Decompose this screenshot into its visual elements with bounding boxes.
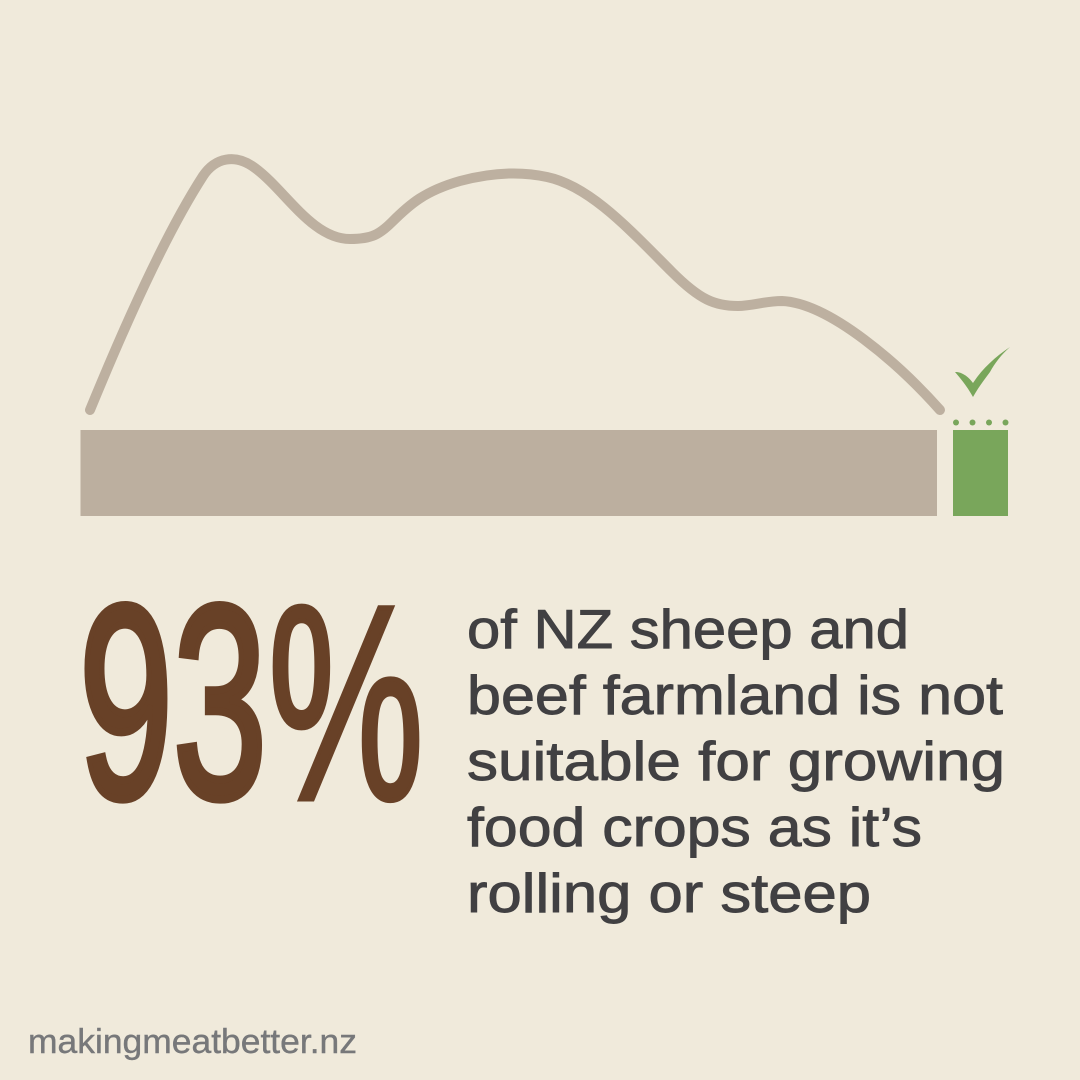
big number 93%: 93 [79,549,267,856]
icon: check mark [955,347,1010,397]
description text [467,598,1005,924]
dotted line above green bar [953,420,1008,426]
description text: of NZ sheep and [467,598,909,660]
description text: rolling or steep [467,862,871,924]
bar: unsuitable land 93% [80,430,937,516]
hill outline [90,159,940,410]
bar: suitable land 7% [953,430,1008,516]
description text: food crops as it’s [467,796,922,858]
website footer: makingmeatbetter.nz [28,1023,357,1061]
big number 93%: % [268,547,424,858]
description text: suitable for growing [467,730,1005,792]
description text: beef farmland is not [467,664,1003,726]
